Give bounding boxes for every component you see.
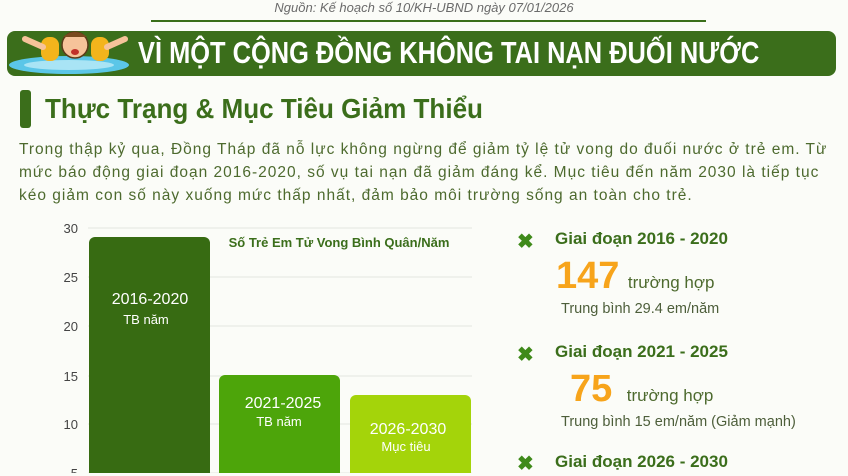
stat: 2016-2020: Trung bình 29.4 em/năm	[561, 301, 719, 317]
icon: swimmer	[9, 31, 129, 74]
bar chart: 20	[64, 319, 78, 334]
bar: 2016-2020: 2016-2020	[112, 291, 188, 308]
stat: 2016-2020	[517, 229, 728, 317]
bar chart: 25	[64, 270, 78, 285]
stat: 2016-2020: 147 trường hợp	[556, 255, 714, 297]
stat: 2021-2025: ✖	[517, 344, 534, 366]
stat: 2021-2025	[517, 342, 796, 430]
bar: 2021-2025: TB năm	[256, 414, 302, 429]
stat: 2021-2025: Trung bình 15 em/năm (Giảm mạnh)	[561, 414, 796, 430]
bar chart: 30	[64, 221, 78, 236]
stat: 2026-2030: Giai đoạn 2026 - 2030	[555, 452, 728, 471]
bar: 2021-2025	[219, 375, 340, 476]
stat: 2016-2020: ✖	[517, 231, 534, 253]
bar: 2016-2020	[89, 237, 210, 476]
section heading: Thực Trạng & Mục Tiêu Giảm Thiểu	[45, 93, 483, 124]
banner title: VÌ MỘT CỘNG ĐỒNG KHÔNG TAI NẠN ĐUỐI NƯỚC	[138, 35, 759, 70]
bar chart: 15	[64, 369, 78, 384]
bar chart	[64, 221, 472, 473]
bar: 2026-2030: Mục tiêu	[381, 439, 431, 454]
stat: 2026-2030: ✖	[517, 453, 534, 475]
stat: 2021-2025: Giai đoạn 2021 - 2025	[555, 342, 728, 361]
stats panel	[517, 229, 796, 475]
source note: Nguồn: Kế hoạch số 10/KH-UBND ngày 07/01/2026	[274, 0, 574, 15]
bar: 2016-2020: TB năm	[123, 312, 169, 327]
bar: 2026-2030	[350, 395, 471, 476]
bar: 2026-2030: 2026-2030	[370, 421, 446, 438]
stat: 2016-2020: Giai đoạn 2016 - 2020	[555, 229, 728, 248]
stat: 2026-2030	[517, 452, 728, 475]
intro paragraph: Trong thập kỷ qua, Đồng Tháp đã nỗ lực không ngừng để giảm tỷ lệ tử vong do đuối nước ở trẻ em. Từ mức báo động giai đoạn 2016-2020, số vụ tai nạn đã giảm đáng kể. Mục tiêu đến năm 2030 là tiếp tục kéo giảm con số này xuống mức thấp nhất, đảm bảo môi trường sống an toàn cho trẻ.	[19, 141, 827, 204]
bar chart: 10	[64, 417, 78, 432]
banner	[7, 31, 836, 76]
stat: 2021-2025: 75 trường hợp	[570, 368, 713, 410]
bar: 2021-2025: 2021-2025	[245, 395, 321, 412]
chart title: Số Trẻ Em Tử Vong Bình Quân/Năm	[229, 235, 449, 250]
